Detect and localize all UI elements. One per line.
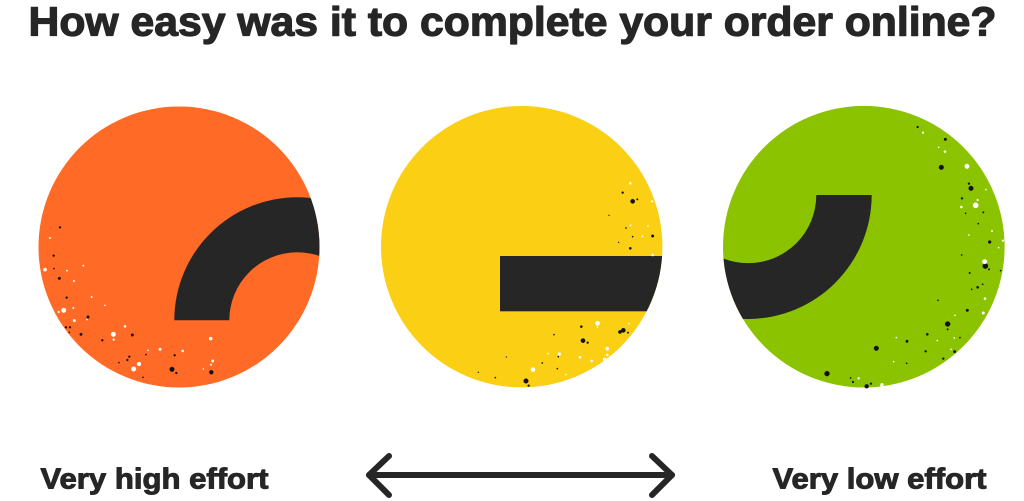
orange disc	[38, 106, 320, 388]
smile arc mouth	[724, 195, 872, 319]
arrow: double-headed	[369, 456, 672, 495]
speckles	[478, 182, 654, 387]
panel: yellow circle, neutral	[381, 106, 670, 387]
label: very low effort: Very low effort	[772, 464, 987, 496]
green disc	[723, 106, 1005, 388]
frown arc mouth	[174, 197, 320, 320]
panel: orange circle, very high effort	[38, 106, 320, 388]
speckles	[824, 126, 1004, 388]
straight bar mouth	[500, 256, 670, 311]
speckles	[43, 226, 214, 378]
yellow disc	[381, 106, 662, 387]
panel: green circle, very low effort	[723, 106, 1005, 389]
label: very high effort: Very high effort	[40, 464, 269, 496]
